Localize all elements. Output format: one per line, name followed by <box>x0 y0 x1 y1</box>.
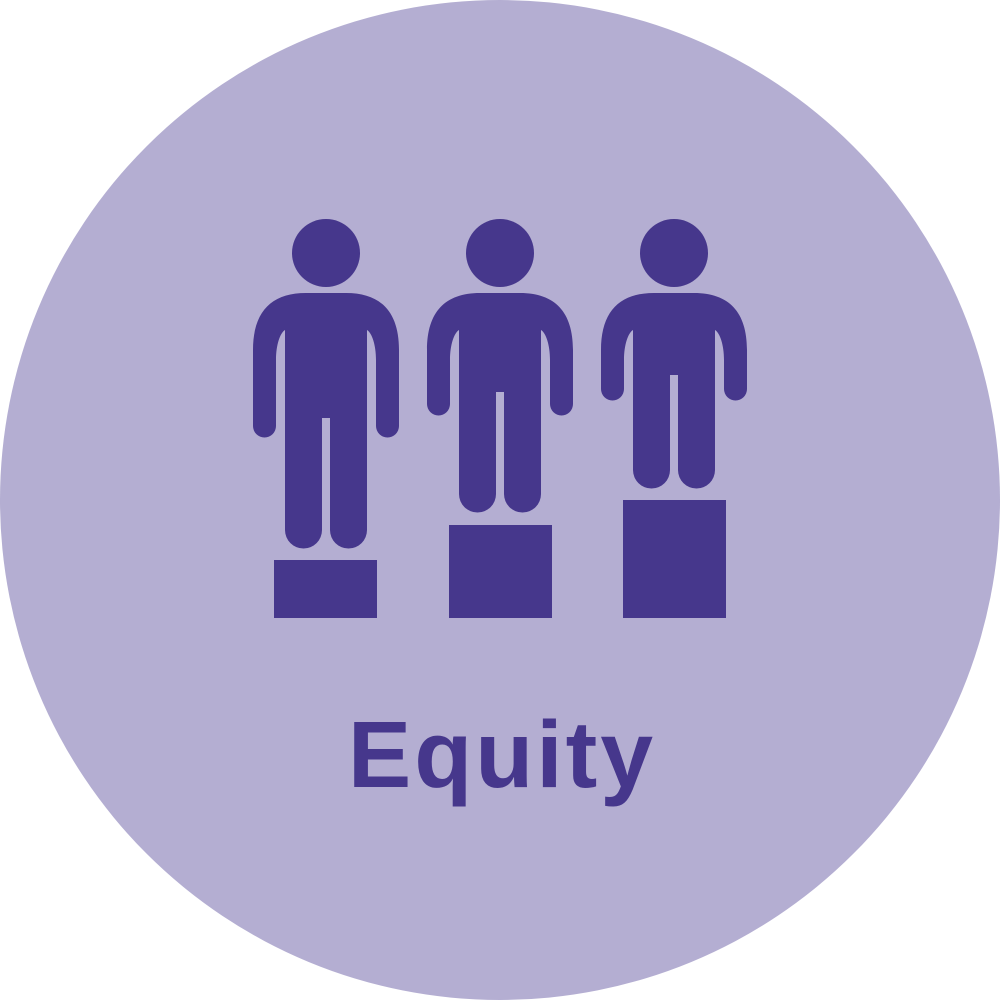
icon: person on low box <box>253 219 399 618</box>
icon: person on medium box <box>427 219 573 618</box>
title: Equity <box>348 702 656 808</box>
icon: person on tall box <box>601 219 747 618</box>
